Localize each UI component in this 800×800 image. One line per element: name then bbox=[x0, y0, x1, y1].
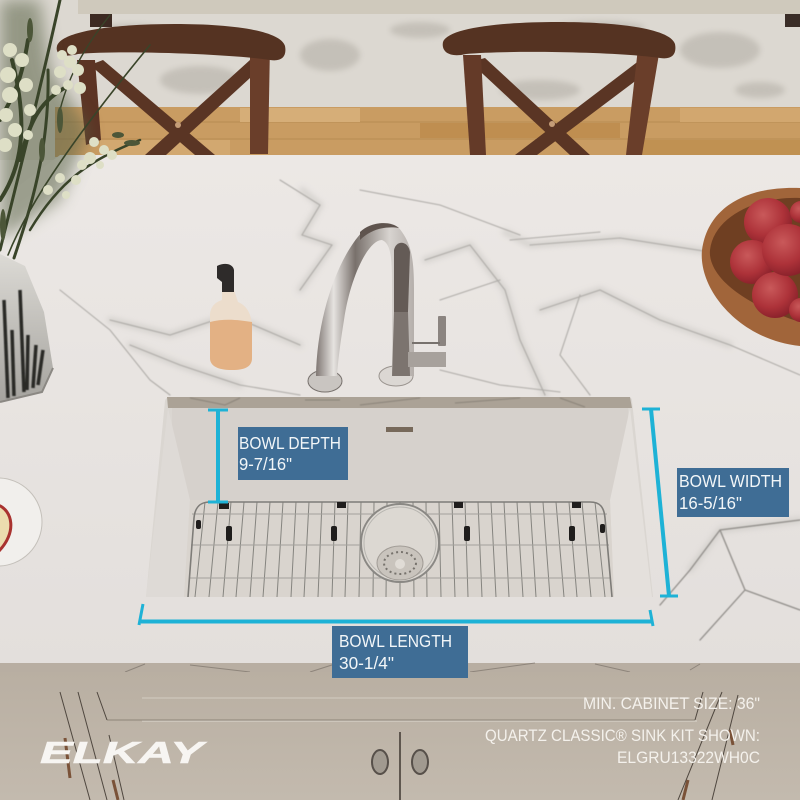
text: minimum cabinet size and kit number: MIN. CABINET SIZE: 36" bbox=[583, 694, 760, 713]
sink bowl bbox=[146, 397, 653, 597]
marble veins bbox=[60, 180, 800, 640]
wooden fruit bowl with apples bbox=[702, 188, 800, 346]
label: bowl length: BOWL LENGTH bbox=[339, 631, 452, 651]
faucet bbox=[308, 223, 446, 392]
label: bowl depth bbox=[238, 427, 348, 480]
label: bowl length: 30-1/4" bbox=[339, 653, 394, 673]
label: bowl depth: BOWL DEPTH bbox=[239, 433, 341, 453]
plant: leaves and flowers bbox=[0, 0, 150, 258]
text: minimum cabinet size and kit number: QUARTZ CLASSIC® SINK KIT SHOWN: bbox=[485, 726, 760, 745]
label: bowl width: 16-5/16" bbox=[679, 493, 742, 513]
chair left bbox=[57, 24, 285, 155]
label: bowl length bbox=[332, 626, 468, 678]
label: bowl width: BOWL WIDTH bbox=[679, 471, 782, 491]
sink rack and drain bbox=[188, 502, 612, 597]
dimension: bowl depth bbox=[208, 409, 348, 502]
logo: Elkay: ELKAY bbox=[40, 735, 208, 770]
wood floor bbox=[55, 107, 800, 157]
dimension: bowl width bbox=[642, 409, 789, 596]
chair right bbox=[443, 22, 675, 155]
countertop front edge bbox=[0, 663, 800, 673]
label: bowl width bbox=[677, 468, 789, 517]
label: bowl depth: 9-7/16" bbox=[239, 454, 292, 474]
glass vase bbox=[0, 254, 53, 402]
background: rug and room behind the counter bbox=[0, 0, 800, 160]
countertop bbox=[0, 155, 800, 666]
cabinets bbox=[0, 672, 800, 800]
soap bottle bbox=[210, 264, 252, 370]
dimension: bowl length bbox=[139, 604, 653, 678]
text: minimum cabinet size and kit number: ELGRU13322WH0C bbox=[617, 748, 760, 767]
plate with apple slices bbox=[0, 478, 42, 566]
text: minimum cabinet size and kit number bbox=[485, 694, 760, 767]
